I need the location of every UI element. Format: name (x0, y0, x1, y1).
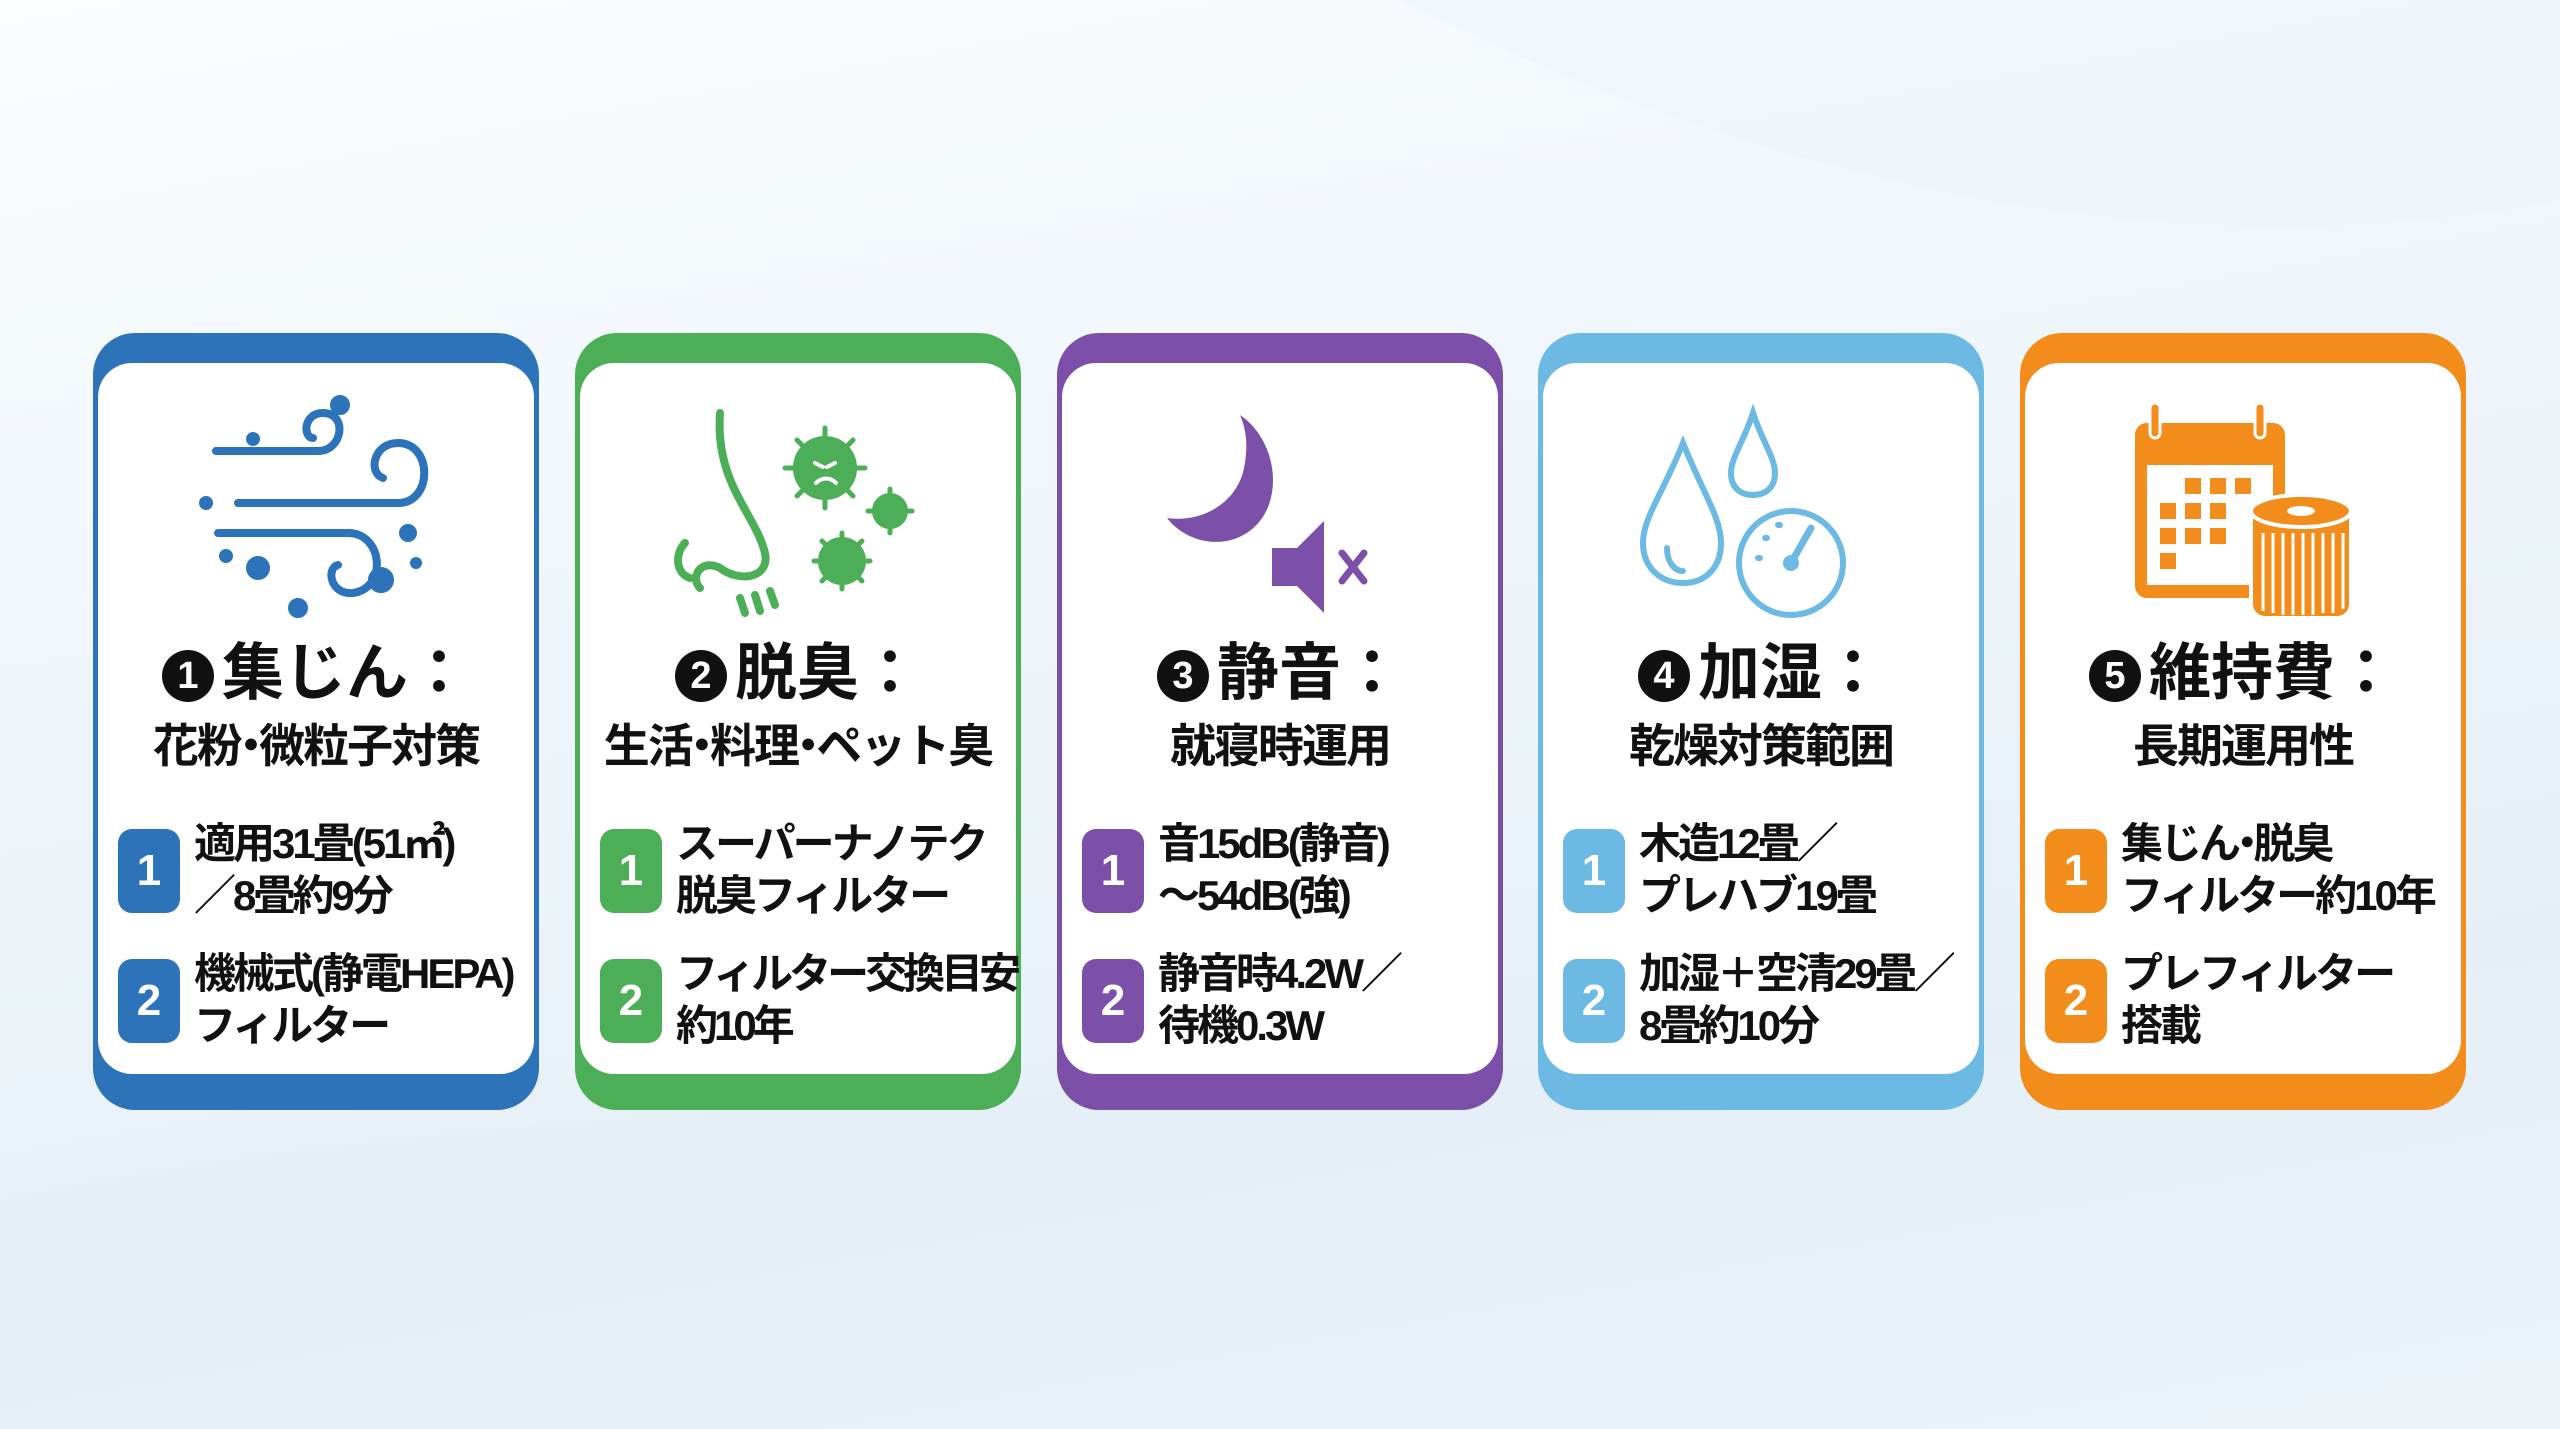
item 2: 機械式(静電HEPA) (194, 950, 513, 997)
item 2: フィルター交換目安 (676, 950, 1017, 997)
item 2 (1563, 950, 1954, 1049)
icon: moon and muted speaker (1167, 415, 1368, 613)
item 1: 音15dB(静音) (1158, 820, 1388, 867)
subheading: 長期運用性 (2133, 720, 2353, 772)
subheading: ・ (679, 720, 723, 772)
item 1: プレハブ19畳 (1639, 872, 1875, 919)
item 1: ・ (2226, 820, 2265, 867)
item 1 (2045, 820, 2436, 919)
item 1: スーパーナノテク (676, 820, 985, 867)
heading: 静音： (1217, 639, 1403, 708)
item 2 (2045, 950, 2393, 1049)
item 1: ／8畳約9分 (194, 872, 391, 919)
heading: 3 (1172, 655, 1194, 697)
item 1 (118, 820, 454, 919)
item 1 (1563, 820, 1876, 919)
item 2: フィルター (194, 1002, 388, 1049)
item 2: 2 (1582, 976, 1606, 1025)
heading: 加湿： (1698, 639, 1884, 708)
item 1 (1082, 820, 1389, 919)
item 1: 1 (1582, 846, 1606, 895)
heading: 5 (2104, 655, 2126, 697)
heading: 集じん： (222, 639, 470, 708)
item 1: フィルター約10年 (2121, 872, 2434, 919)
item 2: プレフィルター (2121, 950, 2393, 997)
subheading: 花粉 微粒子対策 (153, 720, 479, 772)
icon: calendar and filter (2135, 404, 2349, 616)
panel: humidification (1538, 333, 1984, 1110)
panel: quiet (1057, 333, 1503, 1110)
icon: wind and particles (199, 395, 428, 618)
item 2: 2 (2064, 976, 2088, 1025)
item 2: 静音時4.2W／ (1158, 950, 1400, 997)
item 1: 1 (1101, 846, 1125, 895)
item 2: 2 (137, 976, 161, 1025)
item 1: 木造12畳／ (1639, 820, 1836, 867)
item 1: 1 (619, 846, 643, 895)
subheading: 生活 料理 ペット臭 (604, 720, 992, 772)
heading: 2 (690, 655, 712, 697)
item 2: 約10年 (676, 1002, 791, 1049)
heading: 1 (177, 655, 199, 697)
item 2: 待機0.3W (1158, 1002, 1322, 1049)
subheading: ・ (785, 720, 829, 772)
subheading: ・ (228, 720, 272, 772)
item 1: 適用31畳(51㎡) (194, 820, 453, 867)
item 2: 8畳約10分 (1639, 1002, 1817, 1049)
item 1: 脱臭フィルター (676, 872, 948, 919)
heading: 脱臭： (735, 639, 921, 708)
item 2: 2 (619, 976, 643, 1025)
item 2 (600, 950, 1019, 1049)
item 2: 2 (1101, 976, 1125, 1025)
subheading: 就寝時運用 (1170, 720, 1390, 772)
heading: 維持費： (2149, 639, 2397, 708)
heading: 4 (1653, 655, 1675, 697)
item 2: 搭載 (2121, 1002, 2199, 1049)
item 2 (118, 950, 514, 1049)
item 1 (600, 820, 985, 919)
subheading: 乾燥対策範囲 (1629, 720, 1893, 772)
icon: nose and germs (674, 409, 914, 617)
item 2 (1082, 950, 1402, 1049)
item 1: 1 (137, 846, 161, 895)
icon: drops and gauge (1640, 404, 1846, 618)
panel: dust collection (93, 333, 539, 1110)
item 1: 集じん 脱臭 (2121, 820, 2332, 867)
panel: maintenance cost (2020, 333, 2466, 1110)
item 1: ～54dB(強) (1158, 872, 1349, 919)
panel: deodorizing (575, 333, 1021, 1110)
item 2: 加湿＋空清29畳／ (1639, 950, 1953, 997)
item 1: 1 (2064, 846, 2088, 895)
